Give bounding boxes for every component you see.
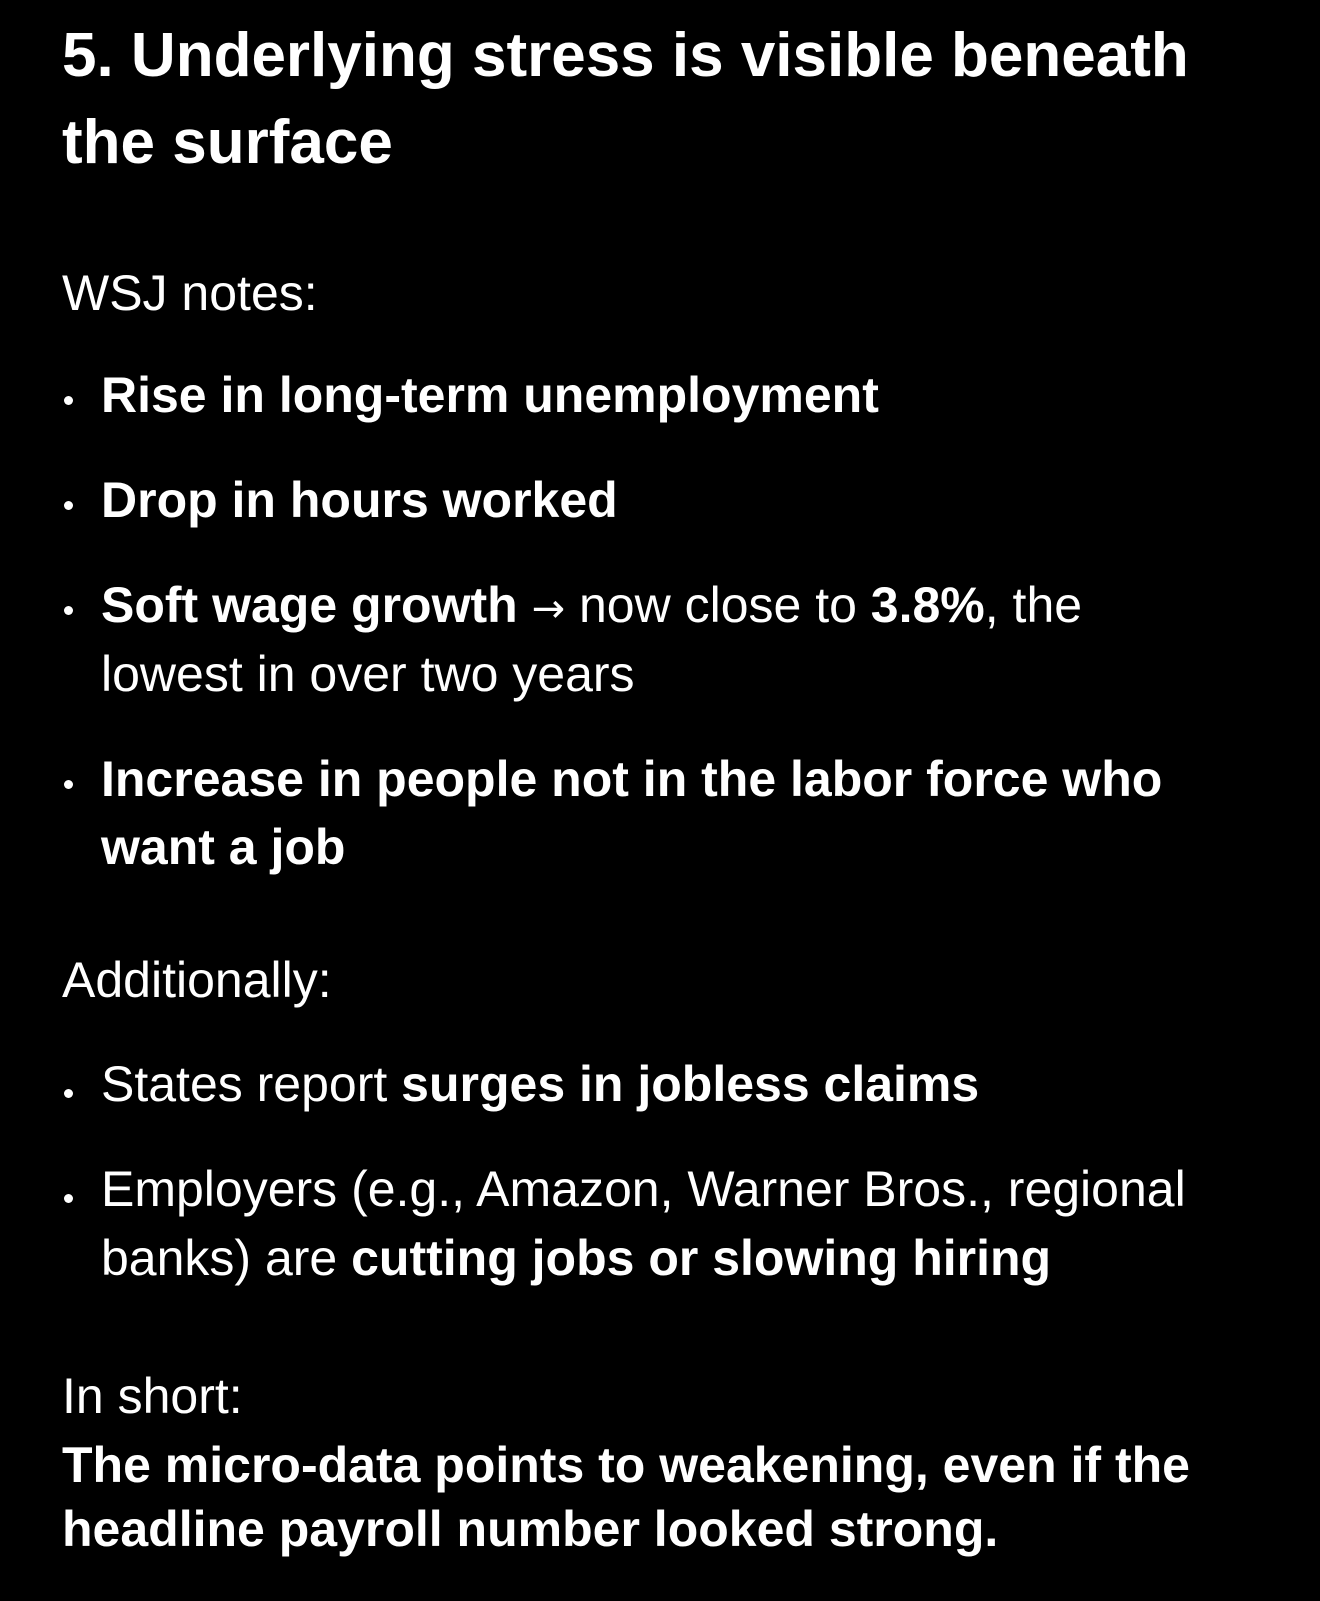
bullet list: additionally: banks) are cutting jobs or slowing hiring [101,1230,1051,1286]
text: the surface [62,108,393,177]
bullet list: WSJ notes: want a job [101,819,345,875]
bullet list: WSJ notes: Rise in long-term unemployment [101,367,879,423]
bullet list: additionally [64,1056,1186,1286]
title [62,21,1189,177]
conclusion [62,1368,1190,1557]
bullet: wage growth [64,577,1082,702]
bullet: long-term unemployment [64,367,879,423]
bullet list: additionally: States report surges in jobless claims [101,1056,979,1112]
bullet: jobless claims [64,1056,979,1112]
bullet list: WSJ notes [64,367,1162,875]
bullet list: additionally: Employers (e.g., Amazon, Warner Bros., regional [101,1161,1186,1217]
bullet list: WSJ notes: Soft wage growth → now close to 3.8%, the [101,577,1082,633]
text: 5. Underlying stress is visible beneath [62,21,1189,90]
bullet: hours worked [64,472,618,528]
heading: WSJ notes: WSJ notes: [62,265,318,321]
bullet list: WSJ notes: Increase in people not in the labor force who [101,751,1162,807]
heading: Additionally: Additionally: [62,952,332,1008]
conclusion: In short: [62,1368,243,1424]
bullet list: WSJ notes: Drop in hours worked [101,472,618,528]
conclusion: headline payroll number looked strong. [62,1501,998,1557]
bullet: labor force [64,751,1162,875]
bullet: employers [64,1161,1186,1286]
bullet list: WSJ notes: lowest in over two years [101,646,635,702]
conclusion: The micro-data points to weakening, even if the [62,1437,1190,1493]
